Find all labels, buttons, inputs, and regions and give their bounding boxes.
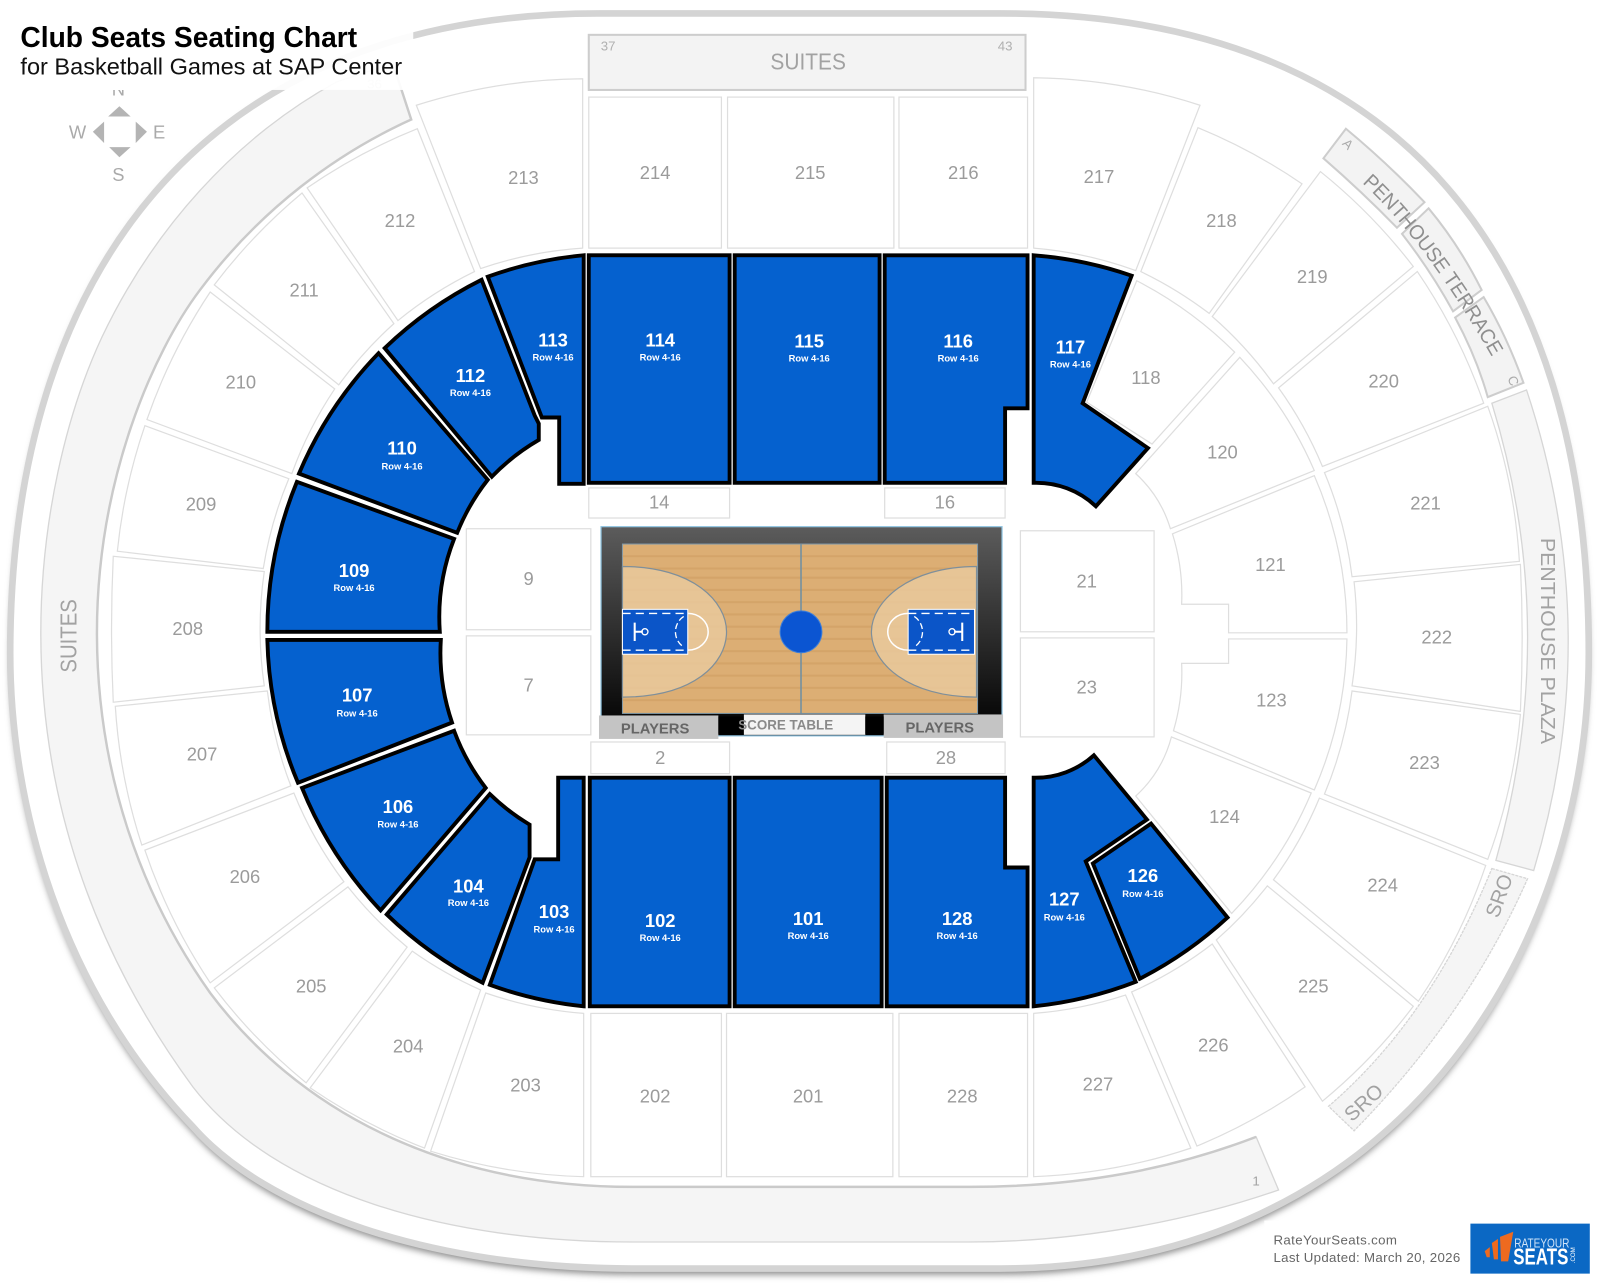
section 228 (899, 1013, 1028, 1177)
club 106: 106 (383, 796, 413, 817)
label: suite 43: 43 (998, 39, 1012, 54)
section 218: 218 (1206, 210, 1237, 231)
club 114: Row 4-16 (640, 352, 681, 362)
club 110 (299, 353, 488, 533)
section 7: 7 (523, 674, 534, 695)
section 210 (147, 292, 335, 474)
club 103 (490, 778, 584, 1006)
section 202 (591, 1013, 721, 1177)
label: penthouse terrace: PENTHOUSE TERRACE (1363, 174, 1504, 356)
section 206 (145, 793, 344, 983)
section 209 (117, 426, 289, 569)
icon: compass: N (112, 78, 125, 99)
section 14 (589, 488, 730, 518)
section 216 (899, 97, 1028, 248)
section 211 (214, 193, 394, 385)
title: Club Seats Seating Chart (20, 22, 357, 54)
section 207: 207 (187, 744, 217, 765)
section 16 (885, 488, 1005, 518)
section 214: 214 (640, 162, 670, 183)
section 120: 120 (1207, 442, 1238, 463)
club 112: Row 4-16 (450, 388, 491, 398)
section 221: 221 (1410, 493, 1441, 514)
logo: RATEYOUR (1514, 1236, 1569, 1251)
label: suite 36: 36 (367, 76, 382, 91)
label: terrace A: A (1340, 136, 1356, 153)
club 128: Row 4-16 (937, 931, 978, 941)
club 101 (735, 778, 882, 1006)
paint right (888, 609, 974, 654)
club 113 (488, 255, 584, 484)
club 117 (1034, 255, 1148, 506)
section 201: 201 (793, 1086, 823, 1107)
lower level unhighlighted sections (466, 281, 1347, 913)
section 216: 216 (948, 162, 979, 183)
section 120 (1136, 357, 1314, 529)
label: terrace C: C (1505, 374, 1522, 388)
penthouse terrace (1322, 127, 1525, 398)
title backing (0, 0, 413, 90)
club 101: Row 4-16 (788, 931, 829, 941)
section 21: 21 (1077, 570, 1097, 591)
section 124 (1136, 737, 1311, 913)
section 224 (1273, 798, 1486, 1001)
section 201 (727, 1013, 893, 1177)
section 211: 211 (289, 279, 319, 300)
section 215 (728, 97, 894, 248)
section 118: 118 (1131, 367, 1161, 388)
section 124: 124 (1209, 806, 1240, 827)
section 219: 219 (1297, 266, 1328, 287)
label: SRO east: SRO (1482, 872, 1518, 921)
section 207 (115, 691, 291, 845)
club 101: 101 (793, 908, 823, 929)
club 126: 126 (1128, 865, 1158, 886)
section 214 (589, 97, 721, 248)
club 126: Row 4-16 (1122, 889, 1163, 899)
label: suites north: SUITES (770, 48, 846, 74)
section 123: 123 (1256, 690, 1287, 711)
club 114: 114 (645, 329, 676, 350)
label: suite 37: 37 (601, 39, 616, 54)
section 121: 121 (1255, 554, 1286, 575)
icon: compass: W (69, 121, 87, 142)
section 225 (1216, 886, 1413, 1101)
section 212: 212 (385, 210, 415, 231)
section 204 (310, 951, 481, 1148)
club 109: 109 (339, 560, 369, 581)
section 14: 14 (649, 492, 669, 513)
upper level sections (112, 78, 1522, 1177)
icon: compass (69, 90, 164, 181)
club 112: 112 (456, 365, 485, 386)
club 115: Row 4-16 (789, 353, 830, 363)
section 205 (214, 887, 407, 1083)
club 102: 102 (645, 910, 676, 931)
club 103: Row 4-16 (533, 925, 575, 935)
club 110: 110 (387, 438, 417, 459)
logo: .COM (1570, 1247, 1577, 1263)
club 112 (385, 280, 539, 477)
club 115: 115 (794, 330, 824, 351)
club 116: 116 (943, 330, 973, 351)
section 227 (1034, 995, 1191, 1177)
players bench right: PLAYERS (906, 721, 974, 737)
club 106 (302, 731, 486, 910)
section 215: 215 (795, 162, 826, 183)
icon: compass: E (153, 121, 165, 142)
players bench right (884, 714, 1003, 738)
section 219 (1212, 172, 1413, 384)
section 9: 9 (523, 568, 534, 589)
club 126 (1093, 824, 1228, 979)
club 104 (387, 794, 530, 983)
club 117: 117 (1056, 337, 1085, 358)
club 107: 107 (342, 685, 372, 706)
section 28: 28 (936, 747, 956, 768)
club seats highlighted sections (267, 255, 1228, 1006)
section 9 (466, 529, 591, 630)
three point area right (871, 566, 977, 697)
credit box (1264, 1221, 1470, 1282)
club 109 (267, 482, 454, 632)
section 217: 217 (1084, 166, 1114, 187)
players bench left (599, 715, 718, 739)
section 218 (1141, 128, 1302, 313)
section 2 (591, 742, 730, 774)
players bench left: PLAYERS (621, 722, 689, 738)
club 109: Row 4-16 (333, 583, 375, 593)
club 104: 104 (453, 875, 484, 896)
club 113: Row 4-16 (532, 352, 574, 362)
standing room SRO (1329, 869, 1528, 1131)
section 220 (1279, 272, 1484, 466)
logo (1470, 1224, 1590, 1274)
section 220: 220 (1368, 370, 1399, 391)
section 222: 222 (1421, 626, 1452, 647)
section 227: 227 (1083, 1073, 1113, 1094)
section 213 (416, 79, 583, 269)
section 23 (1020, 638, 1154, 737)
club 116 (885, 255, 1028, 483)
three point area left (622, 566, 727, 697)
section 208 (112, 556, 264, 702)
penthouse plaza (1492, 390, 1568, 871)
score table (718, 714, 884, 735)
label: SRO south: SRO (1341, 1080, 1388, 1126)
club 110: Row 4-16 (381, 461, 423, 471)
section 225: 225 (1298, 975, 1329, 996)
label: suite 1: 1 (1252, 1173, 1260, 1188)
club 127: Row 4-16 (1044, 912, 1085, 922)
section 123 (1173, 639, 1347, 790)
score table: SCORE TABLE (738, 718, 833, 734)
label: penthouse plaza: PENTHOUSE PLAZA (1536, 538, 1558, 744)
icon: compass: S (112, 164, 124, 185)
section 226 (1132, 944, 1305, 1146)
section 208: 208 (172, 618, 203, 639)
source text: RateYourSeats.com (1273, 1232, 1397, 1247)
section 205: 205 (296, 975, 327, 996)
section 7 (466, 636, 591, 735)
club 102 (590, 778, 730, 1006)
section 16: 16 (935, 492, 955, 513)
section 2: 2 (655, 747, 665, 768)
section 217 (1034, 78, 1200, 271)
club 103: 103 (539, 901, 569, 922)
club 107 (267, 640, 452, 783)
club 106: Row 4-16 (377, 820, 419, 830)
paint left (622, 609, 708, 654)
section 206: 206 (230, 866, 260, 887)
section 121 (1172, 476, 1347, 633)
club 127: 127 (1049, 889, 1080, 910)
center line (800, 544, 802, 713)
club 128: 128 (942, 908, 972, 929)
section 212 (307, 129, 474, 321)
club 116: Row 4-16 (938, 353, 979, 363)
center circle (780, 611, 822, 653)
section 202: 202 (640, 1086, 670, 1107)
section 203: 203 (510, 1074, 541, 1095)
club 107: Row 4-16 (337, 708, 378, 718)
label: suites west: SUITES (55, 599, 81, 673)
section 226: 226 (1198, 1035, 1229, 1056)
section 221 (1324, 406, 1519, 577)
suites ring: west and south (41, 63, 1279, 1242)
section 203 (431, 993, 584, 1177)
club 128 (887, 778, 1028, 1006)
club 113: 113 (538, 329, 568, 350)
section 21 (1020, 531, 1154, 632)
section 213: 213 (508, 167, 539, 188)
section 28 (887, 742, 1005, 774)
basketball court (599, 527, 1003, 739)
club 127 (1034, 755, 1147, 1006)
club 115 (735, 255, 880, 483)
section 23: 23 (1077, 676, 1097, 697)
club 117: Row 4-16 (1050, 359, 1091, 369)
club 114 (589, 255, 730, 483)
suites block: north (589, 35, 1026, 90)
section 224: 224 (1367, 874, 1398, 895)
section 223: 223 (1409, 752, 1440, 773)
section 223 (1324, 691, 1520, 859)
club 102: Row 4-16 (640, 933, 681, 943)
section 118 (1087, 281, 1235, 444)
section 222 (1352, 564, 1522, 711)
subtitle: for Basketball Games at SAP Center (20, 53, 402, 79)
section 209: 209 (186, 494, 216, 515)
logo: SEATS (1513, 1243, 1568, 1269)
section 228: 228 (947, 1086, 978, 1107)
section 210: 210 (225, 371, 256, 392)
club 104: Row 4-16 (448, 898, 489, 908)
last updated: Last Updated: March 20, 2026 (1273, 1250, 1460, 1265)
section 204: 204 (393, 1036, 423, 1057)
